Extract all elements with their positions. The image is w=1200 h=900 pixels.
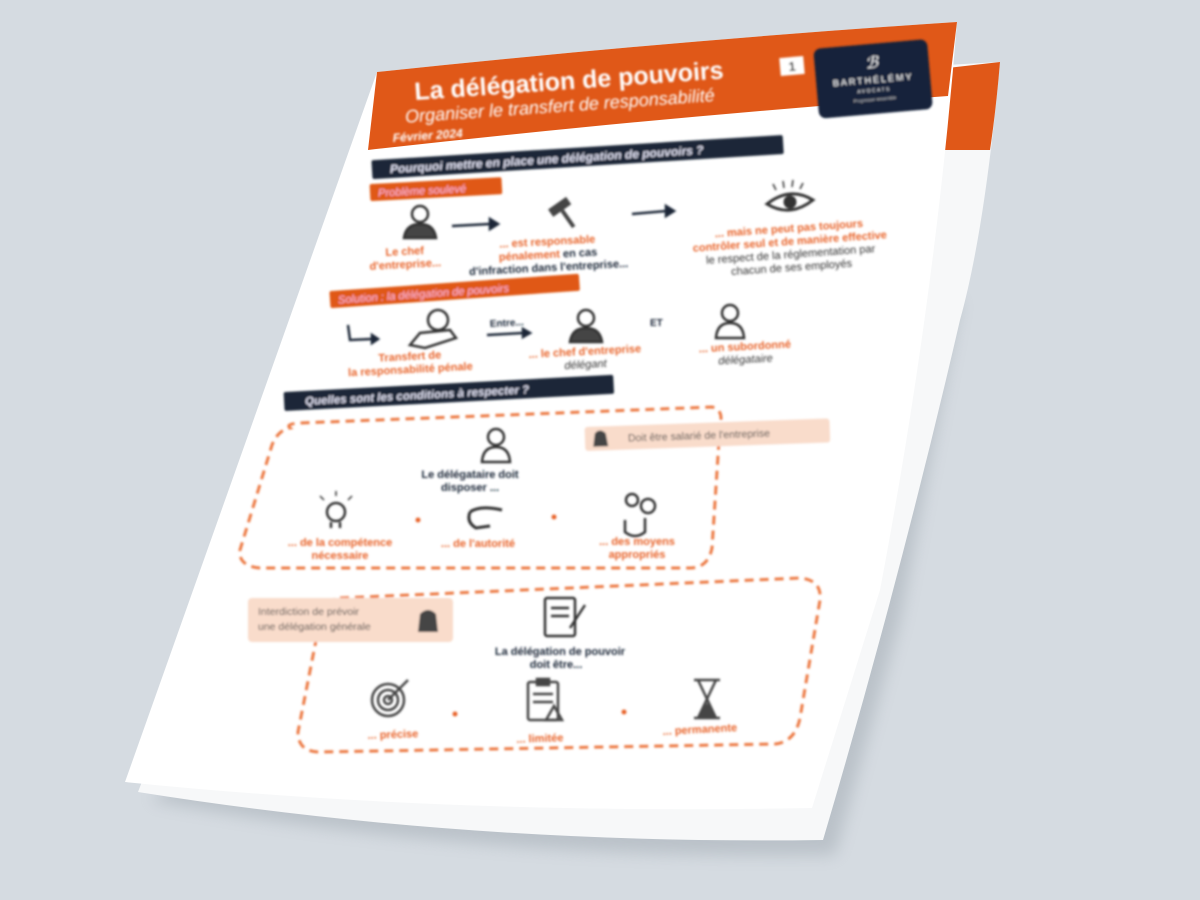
text: chef: Le chef bbox=[385, 245, 425, 259]
dots bbox=[452, 712, 458, 716]
section bar: pourquoi bbox=[371, 135, 784, 179]
text: chef bbox=[369, 244, 441, 273]
callout: salarie bbox=[585, 418, 830, 451]
logo: AVOCATS bbox=[857, 86, 891, 95]
tag: probleme bbox=[370, 177, 502, 201]
text: autorite: ... de l'autorité bbox=[441, 538, 515, 550]
tag: solution bbox=[329, 274, 580, 308]
icon: pointing hand bbox=[469, 508, 502, 528]
front sheet bbox=[125, 22, 957, 809]
icon: person delegataire bbox=[482, 429, 510, 462]
text: controle bbox=[691, 216, 889, 281]
callout: salarie: Doit être salarié de l'entreprise bbox=[628, 428, 770, 444]
text: limitee: ... limitée bbox=[516, 732, 564, 746]
text: controle: ... mais ne peut pas toujours bbox=[714, 218, 863, 240]
tag: probleme: Problème soulevé bbox=[378, 183, 466, 200]
icon: person chef bbox=[404, 206, 436, 238]
logo: Progresser ensemble bbox=[853, 95, 897, 104]
icon: lightbulb bbox=[320, 491, 352, 528]
logo: BARTHÉLÉMY bbox=[832, 71, 914, 88]
title bbox=[402, 56, 726, 127]
text: chef delegant bbox=[528, 343, 642, 374]
text: transfert: la responsabilité pénale bbox=[348, 361, 473, 379]
text: moyens bbox=[599, 536, 675, 561]
panel: conditions delegataire bbox=[240, 407, 830, 568]
text: subordonne: délégataire bbox=[718, 353, 773, 367]
icon: clipboard bbox=[528, 679, 562, 720]
text: delegataire doit: disposer ... bbox=[441, 482, 499, 494]
text: precise: ... précise bbox=[367, 728, 418, 742]
text: moyens: appropriés bbox=[609, 549, 665, 561]
arrow L bbox=[348, 325, 378, 343]
text: transfert bbox=[347, 348, 473, 379]
text: moyens: ... des moyens bbox=[599, 536, 675, 548]
date: Février 2024 bbox=[392, 126, 463, 145]
text: delegataire doit: Le délégataire doit bbox=[421, 469, 519, 481]
arrow entre bbox=[487, 317, 530, 337]
text: responsable: ... est responsable bbox=[499, 234, 596, 251]
section bar: pourquoi: Pourquoi mettre en place une délégation de pouvoirs ? bbox=[390, 143, 705, 176]
callout: interdiction: Interdiction de prévoir bbox=[258, 606, 359, 618]
text: responsable: d'infraction dans l'entreprise... bbox=[469, 258, 629, 278]
text: controle: le respect de la réglementation par bbox=[706, 243, 876, 267]
header band bbox=[368, 22, 957, 150]
text: controle: contrôler seul et de manière effective bbox=[692, 229, 887, 255]
text: transfert: Transfert de bbox=[378, 349, 441, 365]
callout: interdiction bbox=[248, 598, 453, 642]
text: chef delegant: ... le chef d'entreprise bbox=[528, 343, 641, 361]
arrow 2 bbox=[632, 206, 674, 216]
logo: ℬ bbox=[865, 54, 880, 72]
shadow bbox=[150, 300, 960, 855]
text: delegation doit etre: doit être... bbox=[530, 659, 582, 671]
icon: eye bbox=[767, 180, 813, 210]
text: chef delegant: délégant bbox=[564, 358, 608, 372]
text: subordonne bbox=[698, 339, 792, 368]
text: delegation doit etre bbox=[495, 646, 626, 671]
arrow 1 bbox=[452, 219, 498, 229]
callout: interdiction: une délégation générale bbox=[258, 621, 371, 633]
panel: delegation doit etre bbox=[248, 578, 820, 752]
ET: ET bbox=[650, 318, 663, 329]
text: responsable: pénalement en cas bbox=[499, 247, 597, 264]
text: chef: d'entreprise... bbox=[369, 257, 441, 273]
text: competence: nécessaire bbox=[312, 550, 368, 562]
icon: person subordonne bbox=[716, 305, 744, 338]
content bbox=[240, 39, 933, 752]
text: delegation doit etre: La délégation de pouvoir bbox=[495, 646, 626, 658]
text: delegataire doit bbox=[421, 469, 519, 494]
icon: hourglass bbox=[694, 680, 720, 718]
text: competence bbox=[288, 537, 392, 562]
page badge: 1 bbox=[788, 59, 796, 74]
title: La délégation de pouvoirs bbox=[413, 56, 724, 106]
logo bbox=[813, 39, 933, 119]
icon: gavel bbox=[548, 197, 583, 233]
section bar: conditions: Quelles sont les conditions à respecter ? bbox=[305, 384, 529, 408]
text: responsable bbox=[467, 232, 629, 278]
icon: document bbox=[545, 598, 585, 636]
title: Organiser le transfert de responsabilité bbox=[404, 85, 715, 127]
text: subordonne: ... un subordonné bbox=[698, 339, 791, 355]
icon: target bbox=[372, 680, 408, 716]
text: competence: ... de la compétence bbox=[288, 537, 392, 549]
dots bbox=[416, 518, 420, 522]
icon: hand with stamp bbox=[410, 310, 456, 348]
text: permanente: ... permanente bbox=[662, 722, 737, 738]
icon: gears hand bbox=[625, 494, 655, 536]
back sheet bbox=[138, 62, 1000, 840]
tag: solution: Solution : la délégation de pouvoirs bbox=[338, 283, 510, 307]
page badge bbox=[779, 56, 805, 76]
icon: person chef 2 bbox=[570, 310, 602, 342]
arrow entre: Entre... bbox=[490, 317, 524, 330]
text: controle: chacun de ses employés bbox=[731, 258, 853, 278]
section bar: conditions bbox=[284, 375, 614, 411]
